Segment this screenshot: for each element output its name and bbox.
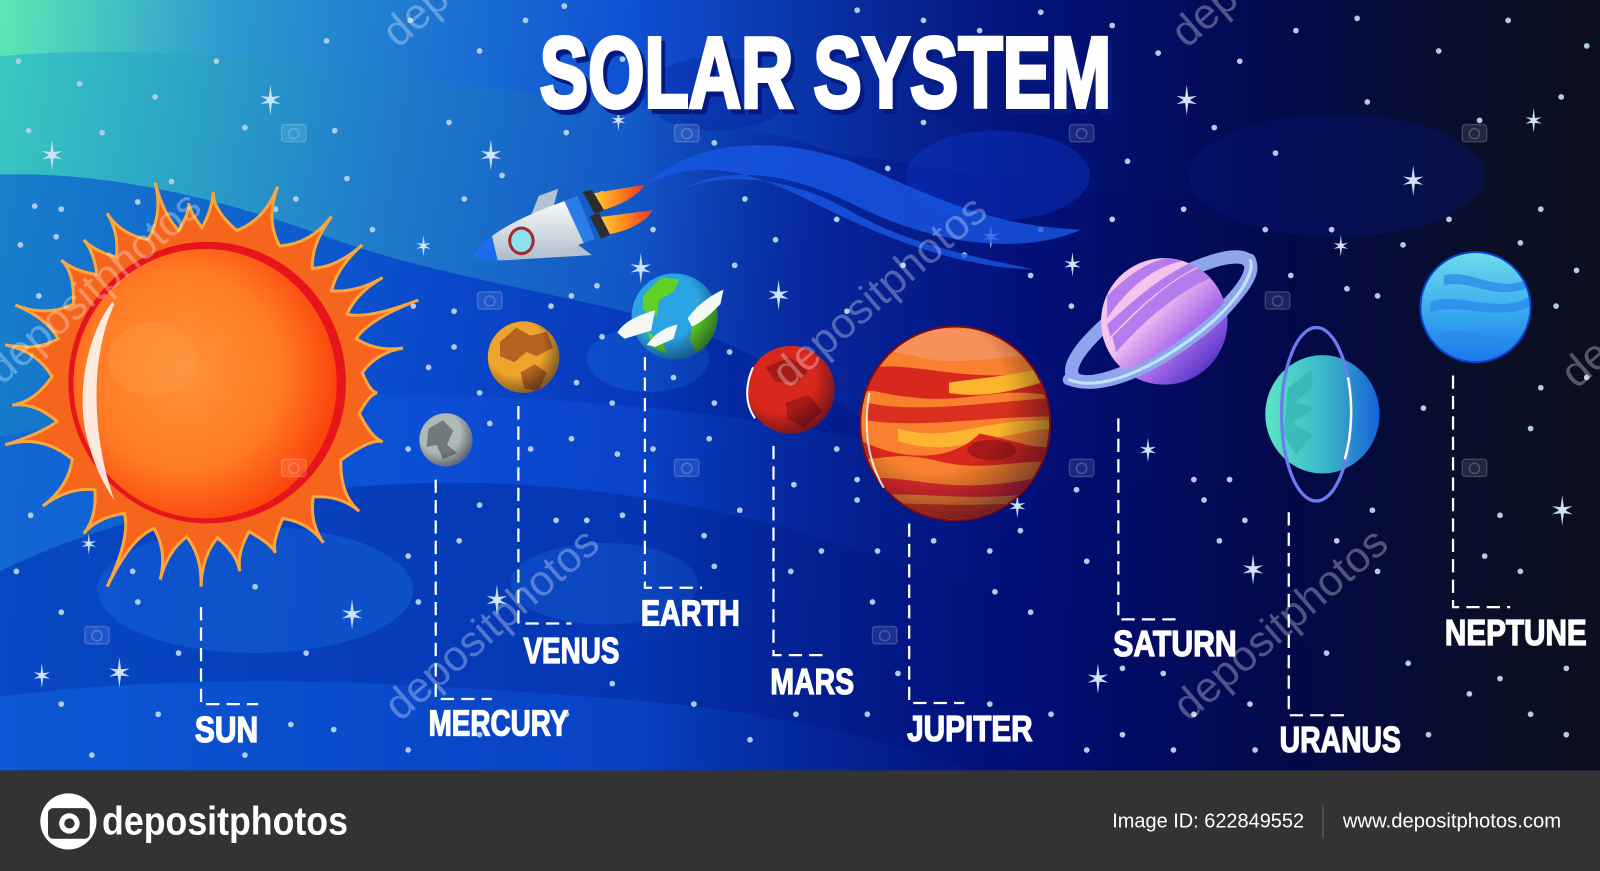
label: Saturn: SATURN: [1113, 624, 1237, 664]
planet: Mars: [747, 346, 835, 434]
planet: Uranus with ring: [1265, 328, 1380, 501]
stars: sparkles: [34, 85, 1572, 694]
footer logo wordmark: depositphotos: [102, 800, 348, 844]
title: SOLAR SYSTEM: [540, 17, 1111, 129]
rocket exhaust trail: [645, 145, 1082, 269]
title: SOLAR SYSTEM: [544, 22, 1115, 134]
watermarks: depositphotos: [763, 186, 996, 397]
website url: www.depositphotos.com: [1342, 811, 1561, 833]
label: Sun: SUN: [195, 710, 258, 750]
rocket: [474, 185, 653, 261]
footer logo icon: [40, 793, 96, 849]
image id: Image ID: 622849552: [1112, 811, 1304, 833]
dashed leader lines: [201, 357, 1510, 715]
planet: Saturn with ring: [1062, 250, 1258, 389]
watermarks: depositphotos: [1164, 518, 1397, 730]
sun rays: [5, 183, 418, 587]
footer bar: [0, 770, 1600, 871]
planet: Neptune: [1419, 251, 1532, 363]
label: Venus: VENUS: [523, 631, 619, 671]
ring front arc: [1068, 259, 1251, 383]
planet: Mercury: [419, 413, 472, 466]
label: Mars: MARS: [770, 662, 854, 702]
planet: Jupiter: [859, 326, 1051, 522]
sun: [5, 183, 418, 587]
label: Uranus: URANUS: [1280, 720, 1401, 760]
watermarks: depositphotos: [375, 518, 608, 730]
planet: Earth: [617, 273, 723, 359]
label: Earth: EARTH: [641, 593, 740, 633]
label: Mercury: MERCURY: [429, 704, 569, 744]
planet: Venus: [488, 321, 559, 393]
label: Jupiter: JUPITER: [907, 709, 1033, 749]
